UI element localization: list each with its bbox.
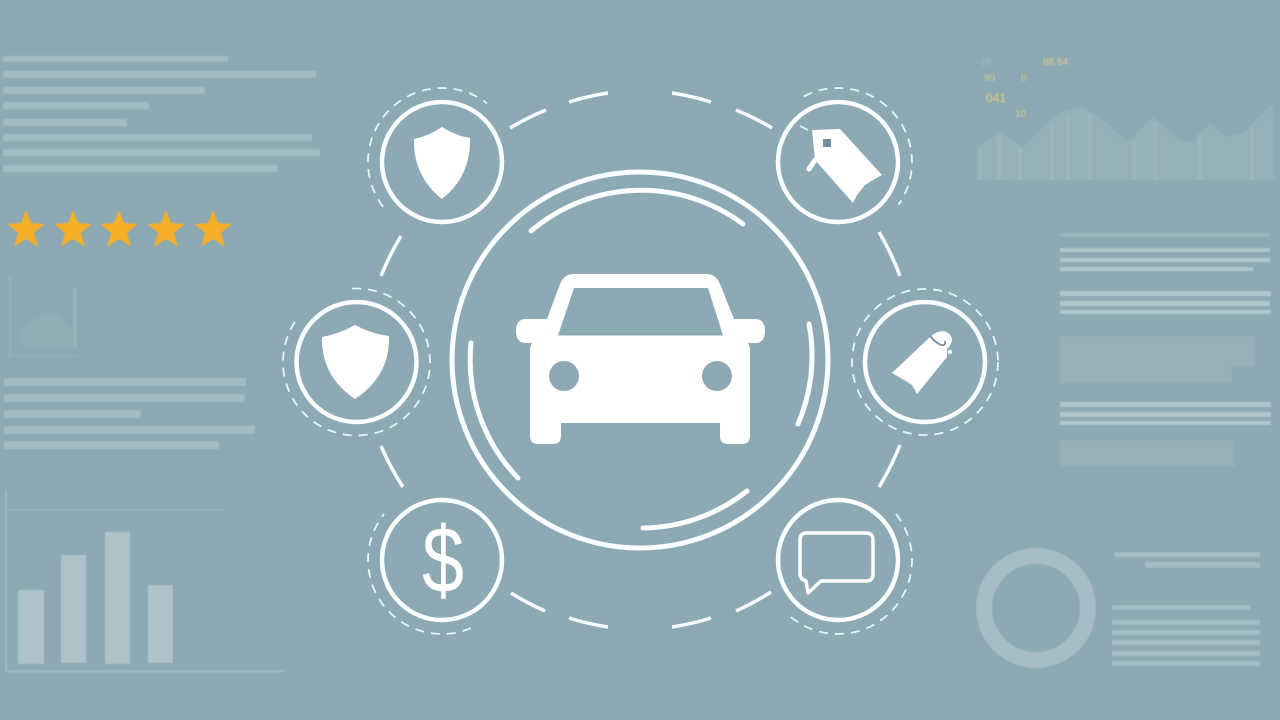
- faint stats with yellow figures: · ph ·· ·: [976, 57, 1009, 68]
- badge: bottom right speech bubble: [778, 500, 912, 634]
- text block: bottom right placeholder lines: [1112, 552, 1260, 666]
- icon: car: [516, 274, 765, 444]
- text block: top left placeholder lines: [3, 56, 320, 172]
- small faint area chart: [9, 275, 79, 358]
- faint stats with yellow figures: 88.64: [1043, 57, 1068, 68]
- text block: middle left placeholder lines: [4, 378, 255, 449]
- icon: shield: [414, 127, 470, 199]
- icon: dollar sign: $: [422, 508, 464, 613]
- chart axes: [5, 490, 284, 672]
- icon: speech bubble: [800, 533, 873, 593]
- badge: top left shield: [368, 88, 502, 222]
- text block: right side placeholder lines: [1060, 233, 1271, 466]
- badge: middle left shield: [283, 289, 430, 436]
- rating: five stars: [7, 210, 232, 247]
- donut chart: [984, 556, 1088, 660]
- faint stats with yellow figures: 10: [1015, 109, 1027, 120]
- central car emblem: [452, 172, 828, 548]
- badge: bottom left dollar: [368, 500, 502, 634]
- connecting dashed ring: [381, 93, 900, 627]
- icon: price tag: [892, 331, 952, 394]
- icon: shield: [322, 325, 389, 399]
- bar chart: [5, 490, 284, 672]
- inner arcs: [470, 190, 812, 528]
- icon: price tag: [800, 126, 882, 203]
- faint stats with yellow figures: 041: [986, 91, 1006, 105]
- shaded blocks: [1060, 336, 1255, 466]
- chart bars: [18, 532, 173, 664]
- outer ring: [452, 172, 828, 548]
- faint area chart, top right: [977, 103, 1275, 180]
- badge: middle right price tag: [852, 289, 998, 435]
- faint stats with yellow figures: 0: [1021, 73, 1027, 84]
- badge: top right price tag: [778, 88, 912, 222]
- faint stats with yellow figures: ··: [975, 109, 982, 120]
- faint stats with yellow figures: 90: [984, 73, 996, 84]
- faint stats with yellow figures: [975, 57, 1068, 120]
